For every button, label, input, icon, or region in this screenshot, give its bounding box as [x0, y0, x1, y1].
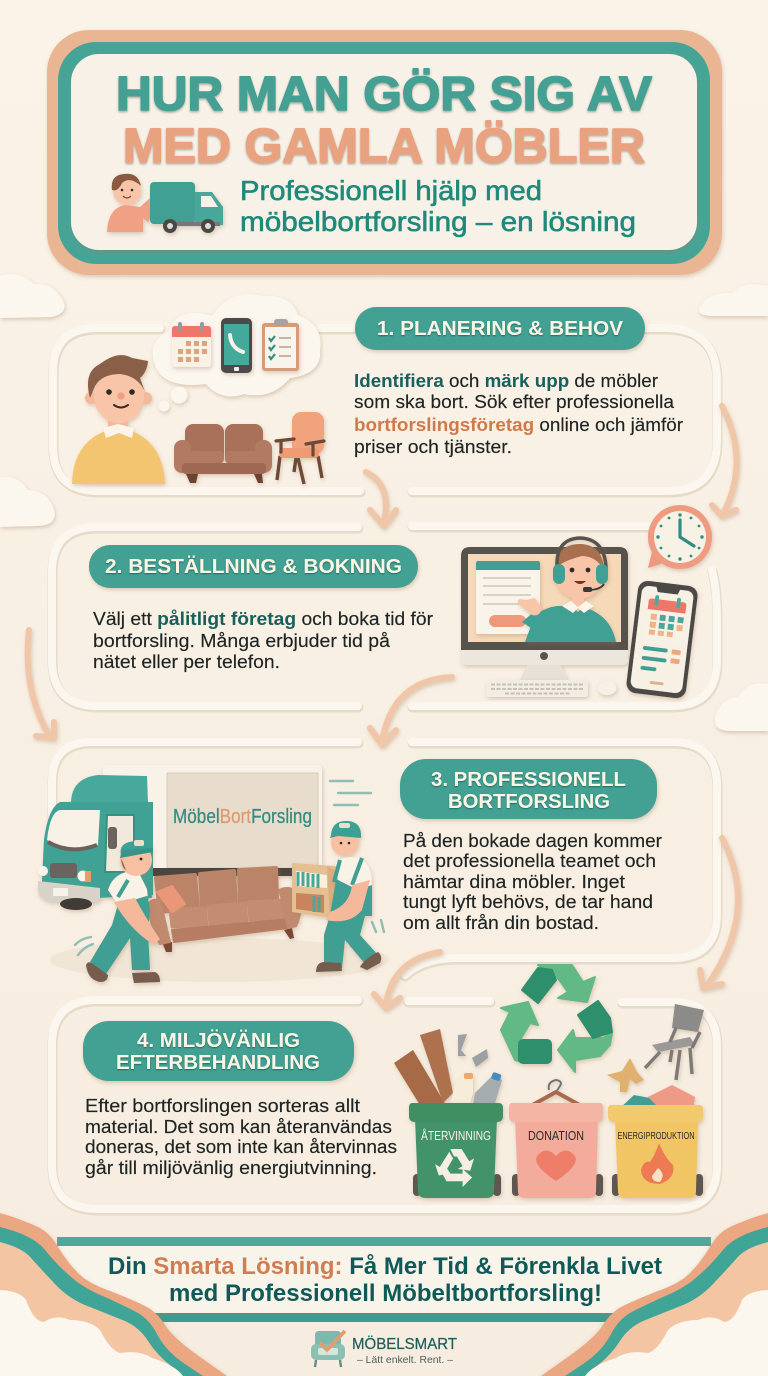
badge: step 3 heading: BORTFORSLING	[448, 791, 610, 813]
arrows between steps	[28, 406, 738, 1008]
wooden planks	[394, 1029, 453, 1110]
icon: desktop computer	[461, 547, 628, 680]
keyboard and mouse	[486, 680, 616, 697]
title panel	[47, 30, 722, 275]
broken chair	[645, 1004, 704, 1080]
text: step 2 description: Välj ett pålitligt företag och boka tid för	[93, 609, 424, 629]
bin: donation: DONATION	[528, 1129, 584, 1143]
text: step 3 description: om allt från din bostad.	[403, 913, 599, 933]
icon: smartphone with calendar	[625, 580, 699, 699]
logo wordmark: MÖBELSMART	[352, 1335, 458, 1353]
badge: step 2 heading	[89, 545, 418, 588]
panel: step 4 frame	[52, 1000, 718, 1210]
icon: large recycling symbol	[501, 965, 612, 1072]
sofa	[148, 868, 300, 952]
background clouds	[0, 274, 768, 731]
mover right	[316, 821, 381, 972]
logo: Möbelsmart	[311, 1331, 458, 1367]
text: step 4 description: doneras, det som inte kan återvinnas	[85, 1137, 397, 1157]
banner text: med Professionell Möbeltbortforsling!	[169, 1280, 602, 1307]
bin: recycling	[409, 1103, 503, 1198]
logo tagline: – Lätt enkelt. Rent. –	[357, 1354, 453, 1366]
step 3 illustration: truck and movers carrying sofa	[38, 765, 390, 983]
support agent	[518, 538, 616, 642]
step 4 illustration: recycling bins and waste	[394, 965, 704, 1198]
panel: step 2 frame	[52, 526, 718, 708]
text: step 3 description: hämtar dina möbler. Inget	[403, 872, 625, 892]
online form window	[476, 561, 540, 634]
text: step 1 description: som ska bort. Sök efter professionella	[354, 392, 675, 412]
badge: step 3 heading: 3. PROFESSIONELL	[431, 769, 626, 791]
text: step 1 description: bortforslingsföretag online och jämför	[354, 415, 676, 435]
panel: step 1 frame	[53, 328, 718, 492]
truck	[38, 765, 322, 910]
ground shadow	[50, 938, 390, 982]
text: step 4 description: material. Det som kan återanvändas	[85, 1117, 392, 1137]
icon: checklist clipboard	[262, 319, 299, 371]
thought cloud	[153, 294, 321, 412]
badge: step 1 heading	[355, 307, 645, 350]
mover left	[86, 840, 160, 983]
text: step 2 description: nätet eller per telefon.	[93, 652, 280, 672]
badge: step 2 heading: 2. BESTÄLLNING & BOKNING	[105, 555, 402, 578]
banner text: Din Smarta Lösning: Få Mer Tid & Förenkla Livet	[108, 1253, 669, 1280]
wooden scrap piece	[607, 1058, 644, 1092]
icon: armchair with check	[311, 1331, 345, 1367]
footer: left corner waves and cloud	[0, 1213, 227, 1376]
plastic bottles	[449, 1072, 502, 1110]
text: step 2 description: bortforsling. Många erbjuder tid på	[93, 631, 391, 651]
panel: step 3 frame	[52, 742, 718, 976]
badge: step 4 heading: 4. MILJÖVÄNLIG	[137, 1029, 300, 1052]
bookshelf	[292, 863, 343, 918]
step 2 illustration: computer, agent, phone and clock	[461, 505, 712, 699]
text: step 4 description: går till miljövänlig energiutvinning.	[85, 1158, 377, 1178]
speed lines	[75, 781, 384, 955]
badge: step 4 heading: EFTERBEHANDLING	[116, 1052, 320, 1074]
main title line 1: HUR MAN GÖR SIG AV	[116, 68, 652, 121]
text: step 3 description: det professionella teamet och	[403, 851, 656, 871]
subtitle: möbelbortforsling – en lösning	[240, 206, 636, 237]
scrap metal pieces	[458, 1034, 488, 1067]
man portrait	[72, 355, 165, 484]
closing banner	[55, 1237, 713, 1322]
armchair	[276, 412, 324, 484]
sofa	[174, 424, 272, 483]
bin: donation	[509, 1080, 603, 1198]
icon: man with truck	[107, 174, 223, 233]
main title line 2: MED GAMLA MÖBLER	[123, 120, 645, 173]
bin: recycling: ÅTERVINNING	[421, 1128, 491, 1143]
bin: energy production	[608, 1085, 703, 1198]
text: step 3 description: tungt lyft behövs, de tar hand	[403, 892, 653, 912]
text: step 3 description: På den bokade dagen kommer	[403, 831, 662, 851]
bin: energy production: ENERGIPRODUKTION	[618, 1130, 694, 1142]
badge: step 3 heading	[400, 759, 657, 819]
badge: step 4 heading	[83, 1021, 354, 1081]
text: step 1 description: Identifiera och märk upp de möbler	[354, 371, 654, 391]
badge: step 1 heading: 1. PLANERING & BEHOV	[377, 318, 624, 340]
text: step 4 description: Efter bortforslingen sorteras allt	[85, 1096, 360, 1116]
icon: clock	[648, 505, 712, 569]
footer: right corner waves and cloud	[541, 1213, 768, 1376]
subtitle: Professionell hjälp med	[240, 175, 542, 206]
icon: calendar	[172, 322, 211, 367]
icon: phone	[221, 318, 252, 373]
truck lettering: MöbelBortForsling	[173, 806, 312, 828]
text: step 1 description: priser och tjänster.	[354, 437, 512, 457]
step 1 illustration: man, thought cloud and furniture	[72, 294, 324, 484]
